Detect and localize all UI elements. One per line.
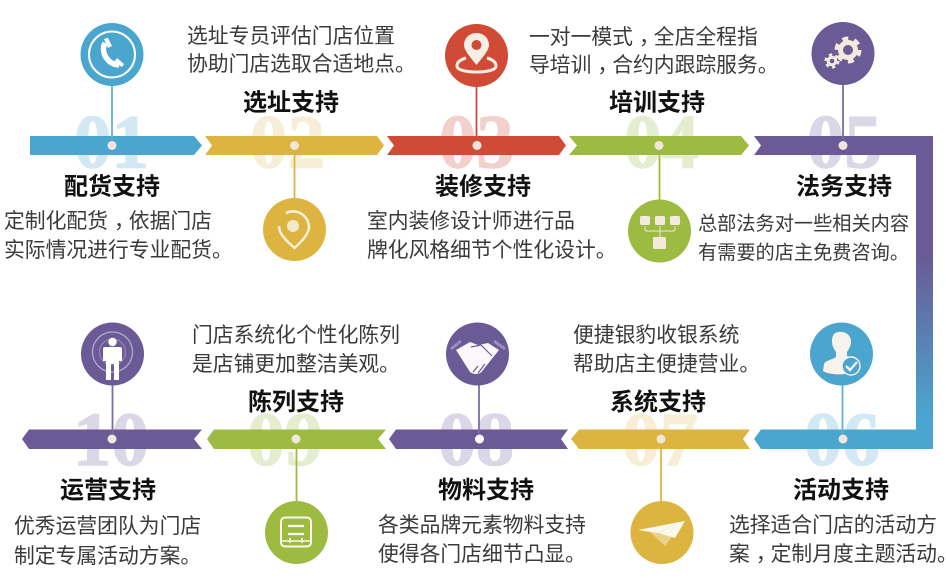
arrow bar 09 [207,430,386,449]
number 04: 04 [624,100,699,184]
description 04: 一对一模式 ，全店全程指 [529,26,758,49]
heading 08: 物料支持 [438,477,534,504]
dot 10 [108,434,116,444]
description 07 [573,324,760,376]
dot 08 [475,434,484,444]
description 10: 制定专属活动方案。 [14,545,201,568]
stem 09 [296,444,298,502]
description 07: 帮助店主便捷营业。 [573,353,760,376]
number 03: 03 [439,100,514,184]
arrow bar 04 [569,136,749,155]
dot 06 [838,434,848,444]
dot 02 [290,141,299,150]
description 01: 实际情况进行专业配货。 [4,239,233,262]
number 09: 09 [247,398,323,482]
description 06 [729,514,946,566]
heading 07: 系统支持 [610,389,706,416]
stem 08 [478,384,480,434]
heading 06: 活动支持 [793,477,889,504]
stem 02 [294,150,296,199]
step 06 活动支持 [729,322,946,566]
number 08: 08 [438,398,514,482]
connector: right vertical bar [916,136,933,449]
description 10: 优秀运营团队为门店 [14,515,201,538]
description 08 [378,514,586,566]
step 03 装修支持 [367,24,617,262]
number 01: 01 [74,100,149,184]
description 02: 选址专员评估门店位置 [187,25,395,48]
heading 09: 陈列支持 [248,389,344,416]
dot 05 [838,141,848,150]
icon: gears [812,22,874,85]
description 09: 门店系统化个性化陈列 [192,324,400,347]
stem 10 [112,384,114,434]
icon: paper plane [630,501,694,564]
dot 01 [108,141,116,150]
description 04: 导培训 ，合约内跟踪服务。 [529,54,779,77]
heading 03: 装修支持 [435,174,531,200]
step 09 陈列支持 [192,324,400,564]
number 10: 10 [73,398,149,482]
description 03 [367,210,617,262]
description 02 [187,25,416,76]
number 02: 02 [250,100,325,184]
description 04 [529,26,779,77]
description 09 [192,324,400,376]
description 02: 协助门店选取合适地点。 [187,53,416,76]
arrow bar 10 [22,430,202,449]
icon: display device [265,501,328,564]
description 10 [14,515,201,568]
step 01 配货支持 [4,23,233,262]
number 06: 06 [804,398,880,482]
description 08: 使得各门店细节凸显。 [378,543,586,566]
description 05 [698,213,909,264]
heading 01: 配货支持 [64,174,160,200]
description 05: 有需要的店主免费咨询。 [698,242,909,264]
step 07 系统支持 [571,324,760,564]
description 07: 便捷银豹收银系统 [573,324,739,347]
step 04 培训支持 [529,26,779,262]
description 08: 各类品牌元素物料支持 [378,514,586,537]
number 05: 05 [807,100,882,184]
description 01: 定制化配货 ，依据门店 [4,210,212,233]
stem 07 [660,444,662,502]
stem 03 [476,86,478,140]
heading 05: 法务支持 [796,174,892,200]
icon: verified person [810,322,873,386]
step 02 选址支持 [187,25,416,261]
description 01 [4,210,233,262]
stem 06 [842,384,844,434]
number 07: 07 [622,398,698,482]
dot 07 [656,434,666,444]
arrow bar 06 [754,430,933,449]
step 05 法务支持 [698,22,933,264]
arrow bar 08 [389,430,568,449]
heading 04: 培训支持 [609,90,705,116]
description 03: 牌化风格细节个性化设计。 [367,239,617,262]
stem 04 [658,150,660,201]
step 10 运营支持 [14,322,202,568]
arrow bar 02 [205,136,384,155]
icon: map marker [263,198,326,261]
icon: phone [80,23,144,86]
description 06: 选择适合门店的活动方 [729,514,937,537]
arrow bar 05 [754,136,933,155]
description 03: 室内装修设计师进行品 [367,210,575,233]
icon: hierarchy [628,200,691,262]
stem 05 [842,84,844,140]
arrow bar 01 [30,136,202,155]
description 09: 是店铺更加整洁美观。 [192,353,400,376]
arrow bar 07 [571,430,750,449]
stem 01 [111,85,113,140]
heading 10: 运营支持 [60,477,156,504]
icon: person with rings [81,322,144,386]
dot 04 [654,141,664,150]
icon: handshake [446,322,509,386]
description 05: 总部法务对一些相关内容 [698,213,909,235]
heading 02: 选址支持 [243,90,339,116]
dot 03 [472,141,482,150]
dot 09 [292,434,300,444]
icon: location pin [445,24,508,87]
arrow bar 03 [387,136,566,155]
step 08 物料支持 [378,322,586,566]
